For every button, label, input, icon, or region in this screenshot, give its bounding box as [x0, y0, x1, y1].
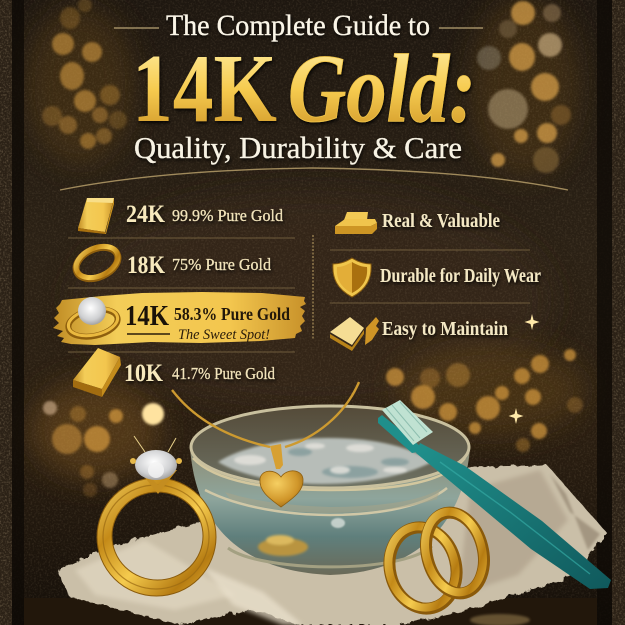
row: 10K: 10K: [124, 360, 163, 387]
pair of gold rings: [380, 505, 492, 616]
row: 14K highlight: The Sweet Spot!: [178, 327, 270, 343]
row: 18K: 75% Pure Gold: [172, 255, 271, 274]
gold ring with diamond: [97, 436, 216, 596]
row: 24K: [78, 198, 283, 234]
row: 24K: 99.9% Pure Gold: [172, 206, 283, 225]
divider arc: [60, 168, 568, 190]
bokeh lights: [42, 0, 583, 497]
benefit: real and valuable: Real & Valuable: [382, 210, 500, 232]
sparkle: right stars: [508, 314, 540, 424]
necklace with heart pendant: [172, 382, 359, 507]
title main: 14K Gold: Gold:: [288, 35, 476, 143]
title main: 14K Gold: 14K: [132, 35, 277, 143]
row: 18K: [71, 240, 271, 285]
table surface: [24, 598, 597, 625]
benefit: durable: Durable for Daily Wear: [380, 265, 541, 287]
row: 14K highlight: [53, 292, 306, 345]
vertical dotted divider: [312, 235, 314, 340]
cloth towel: [57, 465, 607, 625]
benefit: durable: [333, 258, 541, 297]
benefit: easy to maintain: [330, 317, 508, 351]
panel: karat list: [53, 198, 306, 397]
row: 18K: 18K: [127, 252, 165, 279]
sparkle: left glowing light: [142, 403, 164, 425]
row: 14K highlight: 58.3% Pure Gold: [174, 304, 290, 324]
panel: benefits: [330, 210, 541, 351]
row: 10K: [73, 348, 275, 397]
benefit: easy to maintain: Easy to Maintain: [382, 318, 508, 340]
title main: 14K Gold: [132, 35, 476, 143]
benefit: real and valuable: [335, 210, 500, 234]
row: 14K highlight: 14K: [125, 300, 169, 332]
row: 24K: 24K: [126, 201, 165, 228]
glass bowl with water: [190, 405, 470, 575]
toothbrush: [378, 400, 611, 589]
row: 10K: 41.7% Pure Gold: [172, 364, 275, 383]
title line 3: Quality, Durability & Care: [134, 130, 462, 165]
title line 1: The Complete Guide to: [166, 9, 430, 42]
